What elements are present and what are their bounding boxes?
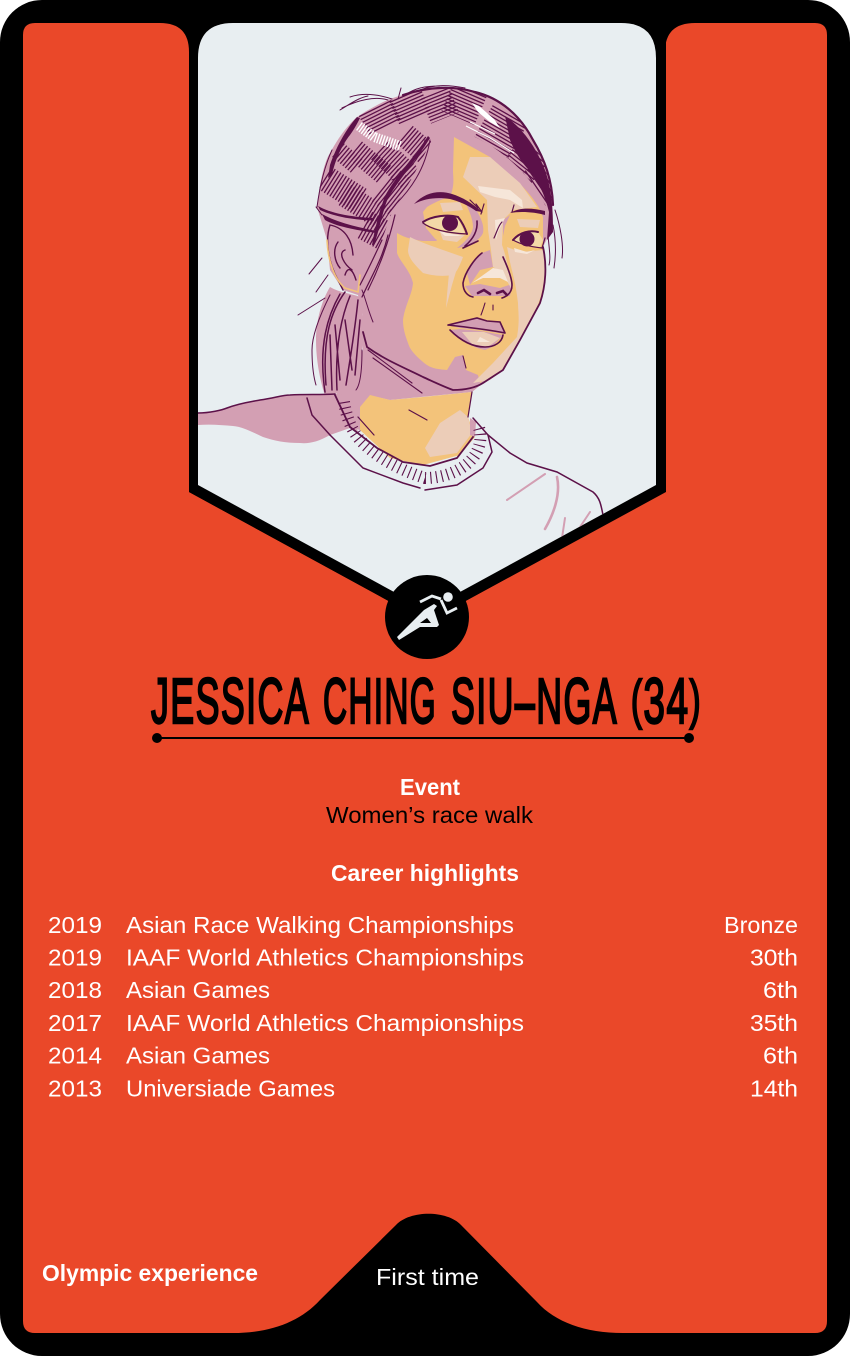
text: event: Women’s race walk (326, 802, 533, 828)
table: career highlights: 2014 (48, 1042, 102, 1068)
title: ) (690, 670, 702, 730)
hair dark masses (318, 116, 553, 245)
table: career highlights: Universiade Games (126, 1076, 335, 1102)
title: SIU–NGA (451, 665, 618, 737)
neck (360, 392, 475, 465)
hair hatching (325, 90, 550, 240)
table: career highlights: 2013 (48, 1076, 102, 1102)
portrait panel (189, 0, 666, 622)
ponytail strands (323, 292, 360, 392)
label: olympic experience: Olympic experience (42, 1260, 258, 1286)
title: CHING (323, 665, 437, 737)
table: career highlights: Bronze (724, 912, 798, 938)
table: career highlights: 30th (750, 944, 798, 970)
face lines (198, 192, 603, 515)
hair highlights (359, 126, 400, 146)
title: 34 (643, 665, 690, 737)
collar ribbing (344, 402, 480, 478)
icon: race walker badge (385, 575, 469, 659)
title (151, 665, 702, 737)
title: JESSICA (151, 665, 310, 737)
ponytail (316, 287, 364, 396)
table: career highlights: IAAF World Athletics Championships (126, 944, 524, 970)
heading: career highlights: Career highlights (331, 860, 519, 886)
face tone (397, 137, 545, 383)
collar shading (335, 394, 358, 432)
eyes (423, 215, 543, 248)
text: event (326, 774, 533, 828)
table: career highlights: 2018 (48, 977, 102, 1003)
table: career highlights (48, 912, 798, 1102)
table: career highlights: Asian Games (126, 977, 270, 1003)
table: career highlights: 35th (750, 1010, 798, 1036)
value: first time: First time (376, 1264, 479, 1290)
table: career highlights: 2019 (48, 912, 102, 938)
lips (448, 318, 505, 334)
title: ( (631, 670, 651, 730)
table: career highlights: IAAF World Athletics Championships (126, 1010, 524, 1036)
text: event: Event (400, 774, 460, 800)
eye and nose shadow (457, 198, 483, 248)
table: career highlights: Asian Games (126, 1042, 270, 1068)
ear (328, 225, 356, 290)
face highlights (463, 157, 537, 290)
shirt lines (198, 394, 335, 413)
table: career highlights: 14th (750, 1076, 798, 1102)
head and hair base (317, 88, 553, 430)
table: career highlights: 2019 (48, 944, 102, 970)
illustration: portrait of athlete (198, 86, 603, 538)
table: career highlights: 2017 (48, 1010, 102, 1036)
hair outline strands (298, 86, 563, 392)
shirt folds (507, 474, 590, 538)
table: career highlights: 6th (763, 1042, 798, 1068)
table: career highlights: Asian Race Walking Championships (126, 912, 514, 938)
title underline (152, 733, 694, 743)
shoulder shadow (198, 394, 350, 443)
table: career highlights: 6th (763, 977, 798, 1003)
